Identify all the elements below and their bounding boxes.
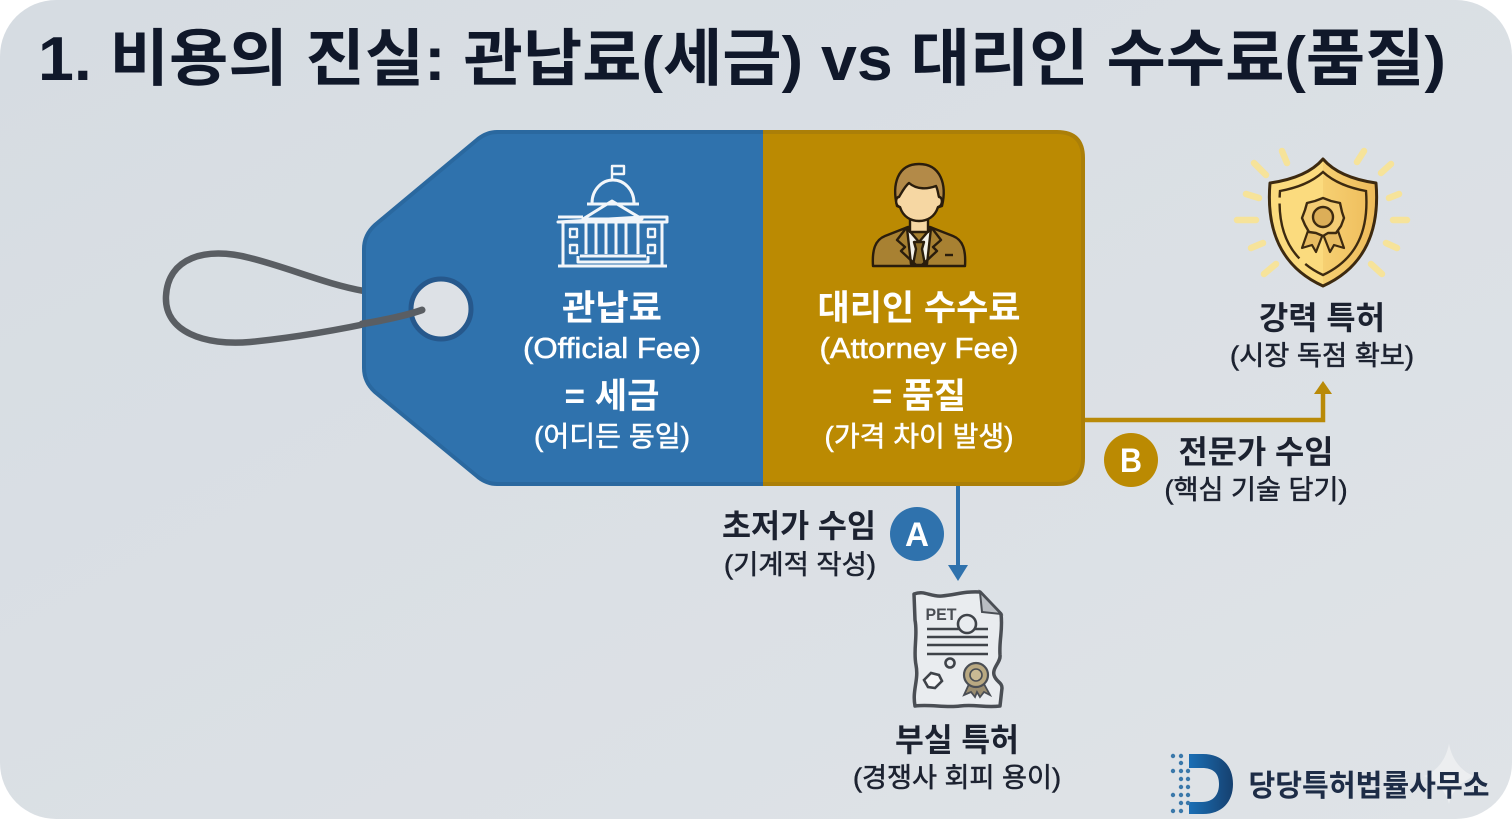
text: attorney fee: = 품질 [872,377,966,416]
logo mark: dotted D [1171,754,1233,814]
label: strong patent [1230,300,1414,371]
text: official fee: 관납료 [562,289,662,328]
text: official fee: (어디든 동일) [534,421,690,452]
label: weak patent [853,722,1061,793]
text: attorney fee: 대리인 수수료 [818,289,1020,328]
arrow B: to strong patent [1085,381,1332,420]
text: official fee [523,289,701,452]
tag eyelet hole [411,279,471,339]
icon: government building [558,166,667,266]
label B: expert attorney: 전문가 수임 [1178,434,1334,470]
title: 1. 비용의 진실: 관납료(세금) vs 대리인 수수료(품질) [38,25,1446,94]
label A: lowest price attorney: 초저가 수임 [722,508,876,544]
text: official fee: (Official Fee) [523,333,701,365]
label: weak patent: 부실 특허 [895,722,1019,758]
label: strong patent: (시장 독점 확보) [1230,341,1414,371]
icon: attorney [873,164,965,266]
watermark sparkle [1424,744,1474,804]
string end through the hole [362,310,422,324]
label A: lowest price attorney: (기계적 작성) [724,550,876,580]
tag right half: attorney fee [763,130,1085,486]
logo [1171,754,1490,814]
logo text: 당당특허법률사무소 [1248,770,1490,803]
text: attorney fee: (Attorney Fee) [820,333,1018,365]
text: attorney fee: (가격 차이 발생) [824,421,1014,452]
badge B [1104,433,1158,487]
string loop of the price tag [166,254,422,343]
icon: shield with rays [1237,151,1407,286]
label B: expert attorney: (핵심 기술 담기) [1164,475,1348,505]
label B: expert attorney [1164,434,1348,505]
icon: damaged patent document [914,592,1002,707]
text: attorney fee [818,289,1020,452]
tag left half: official fee [362,130,763,486]
label A: lowest price attorney [722,508,876,580]
badge A [890,507,944,561]
arrow A: to weak patent [948,486,968,581]
label: weak patent: (경쟁사 회피 용이) [853,763,1061,793]
text: official fee: = 세금 [564,377,660,416]
icon: damaged patent document: PET [926,605,957,624]
price tag [362,132,1083,484]
label: strong patent: 강력 특허 [1259,300,1385,336]
badge B: B [1120,442,1142,480]
badge A: A [905,516,929,554]
